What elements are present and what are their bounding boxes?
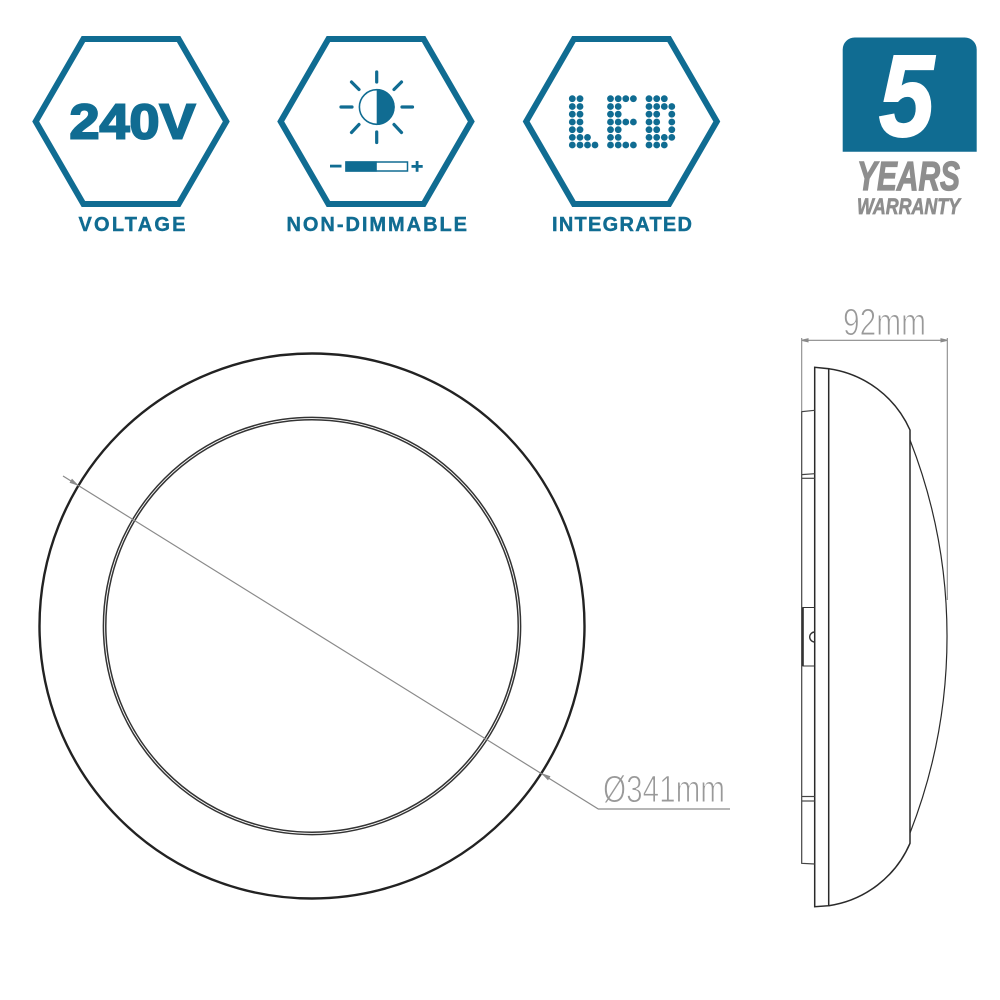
voltage value: 240V [70, 96, 196, 150]
icon: dot matrix LED [569, 95, 675, 148]
badge: 5 years warranty [843, 31, 977, 219]
inner double ring [103, 417, 521, 835]
badge: 240V voltage [36, 39, 226, 236]
side view drawing [802, 302, 947, 907]
sensor housing [803, 608, 815, 666]
hexagon outline: integrated [526, 39, 717, 204]
icon: brightness slider [330, 161, 423, 172]
L [569, 95, 576, 102]
integrated label: INTEGRATED [552, 214, 692, 236]
warranty number: 5 [879, 31, 935, 161]
badge: non-dimmable [281, 39, 471, 236]
warranty text: WARRANTY [857, 194, 962, 219]
voltage label: VOLTAGE [78, 214, 186, 236]
luminaire body outline [815, 367, 947, 907]
front view drawing [40, 354, 730, 898]
hexagon outline: voltage [36, 39, 226, 204]
non-dimmable label: NON-DIMMABLE [286, 214, 467, 236]
icon: half-filled sun [341, 72, 412, 142]
depth dimension [802, 338, 947, 600]
years text: YEARS [857, 153, 960, 199]
D [646, 95, 652, 102]
depth label: 92mm [843, 302, 926, 344]
hexagon outline: non-dimmable [281, 39, 471, 204]
mounting plate [802, 410, 815, 864]
outer ring [40, 354, 584, 898]
warranty box [843, 38, 977, 152]
diameter label: Ø341mm [603, 769, 725, 811]
badge: integrated LED [526, 39, 717, 236]
diameter dimension line [63, 476, 730, 809]
E [607, 95, 614, 102]
